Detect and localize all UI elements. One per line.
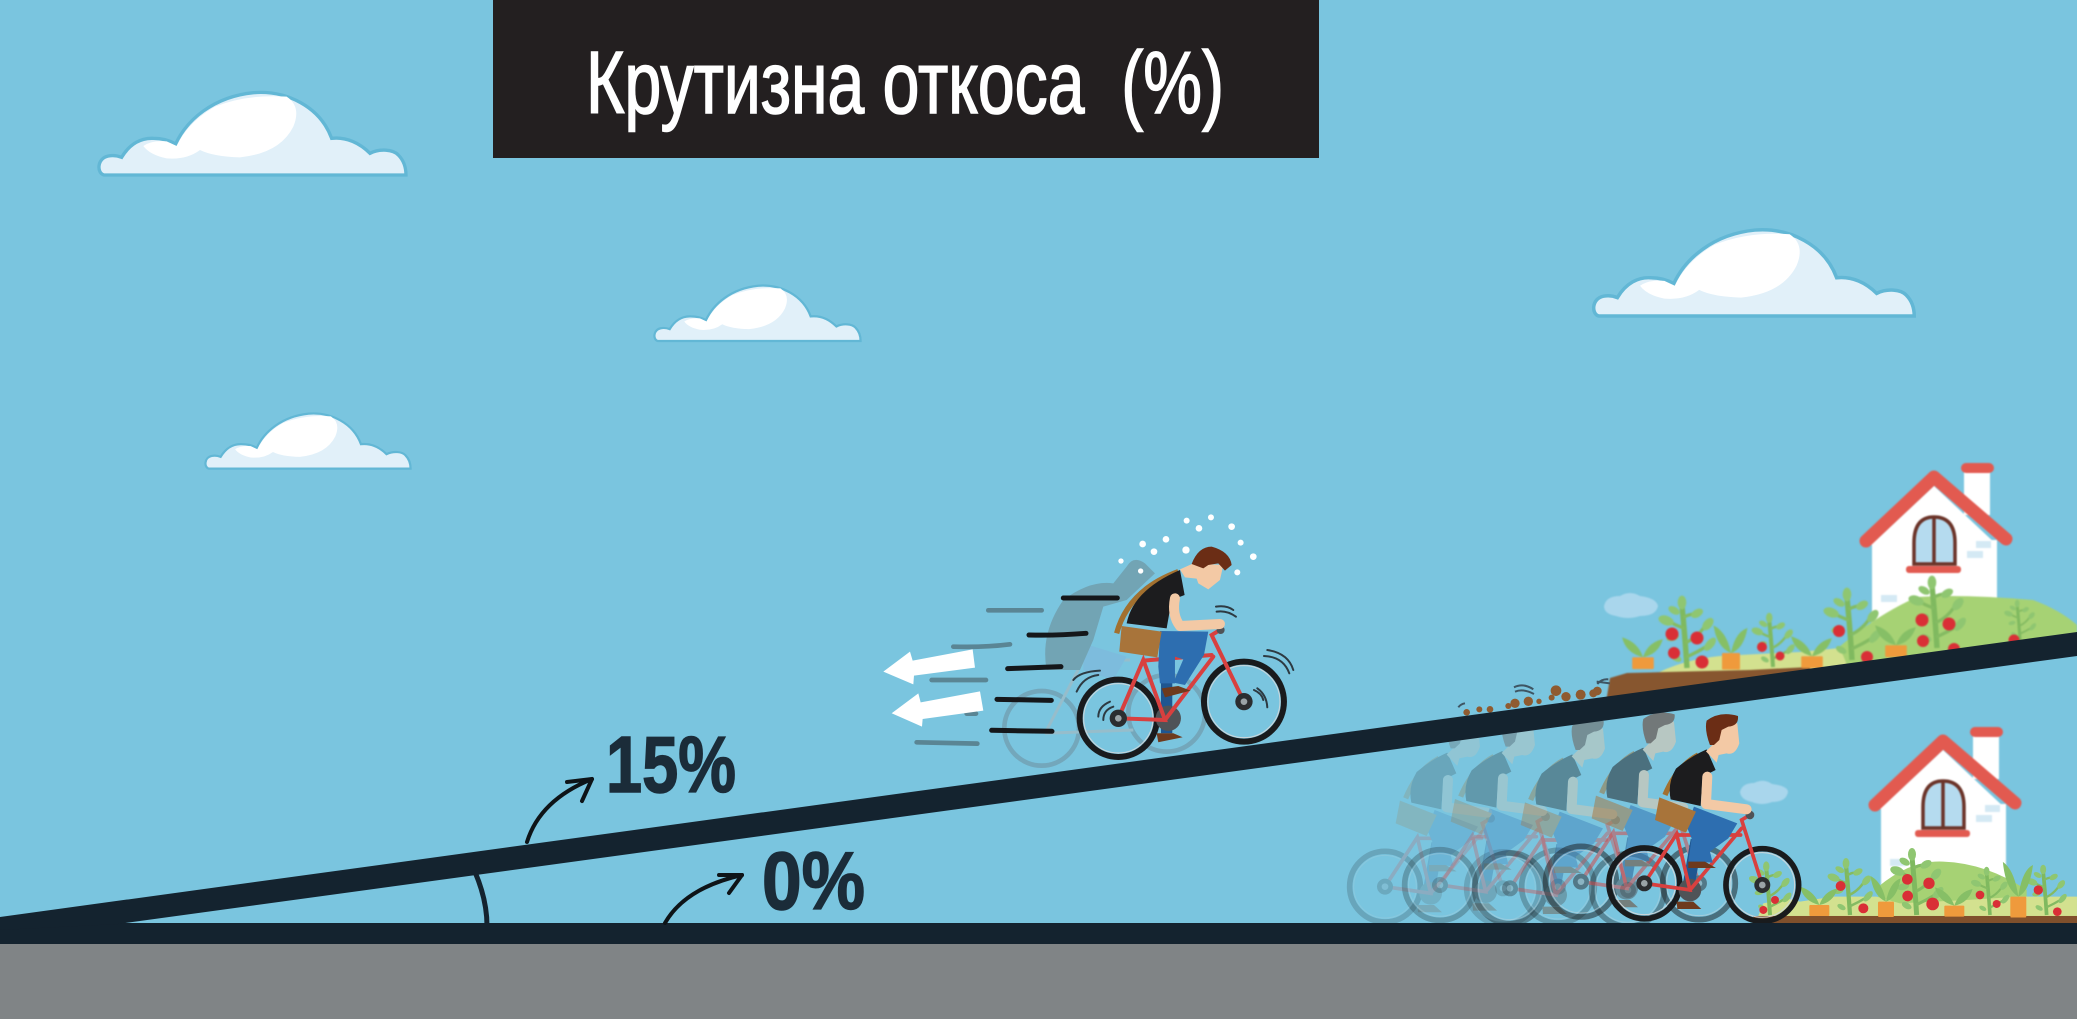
garden on the flat bbox=[1748, 848, 2077, 924]
speed lines: grey bbox=[917, 610, 1042, 744]
cloud: right bbox=[1594, 230, 1914, 316]
sloped road bbox=[0, 632, 2077, 930]
angle arc between slope and road bbox=[475, 872, 487, 926]
cloud: top left bbox=[99, 92, 406, 175]
direction arrows pointing downhill bbox=[883, 649, 983, 727]
sweat drops bbox=[1118, 514, 1257, 575]
uphill cyclist bbox=[1073, 547, 1293, 757]
flat road bbox=[0, 923, 2077, 944]
arrow to 0% bbox=[665, 875, 742, 923]
flat-road cyclist bbox=[1609, 714, 1799, 921]
small puff on the flat bbox=[1740, 781, 1788, 804]
ground bbox=[0, 944, 2077, 1019]
arrow to 15% bbox=[527, 779, 592, 842]
house on the slope bbox=[1866, 463, 2006, 660]
cloud: centre bbox=[654, 286, 861, 341]
ghost trail: flat rider bbox=[1350, 712, 1735, 926]
soil clumps rolling down the slope bbox=[1458, 679, 1610, 716]
cloud: lower left bbox=[205, 413, 411, 469]
label: 0%: 0% bbox=[762, 836, 865, 927]
label: 15%: 15% bbox=[606, 720, 736, 809]
title bbox=[493, 0, 1319, 158]
garden on the slope bbox=[1607, 576, 2077, 715]
speed lines: black bbox=[992, 598, 1117, 731]
ghost trail: uphill rider bbox=[1004, 560, 1205, 766]
small puff on the slope bbox=[1604, 593, 1658, 618]
house on the flat bbox=[1875, 727, 2015, 924]
title: Крутизна откоса (%) bbox=[586, 33, 1224, 132]
